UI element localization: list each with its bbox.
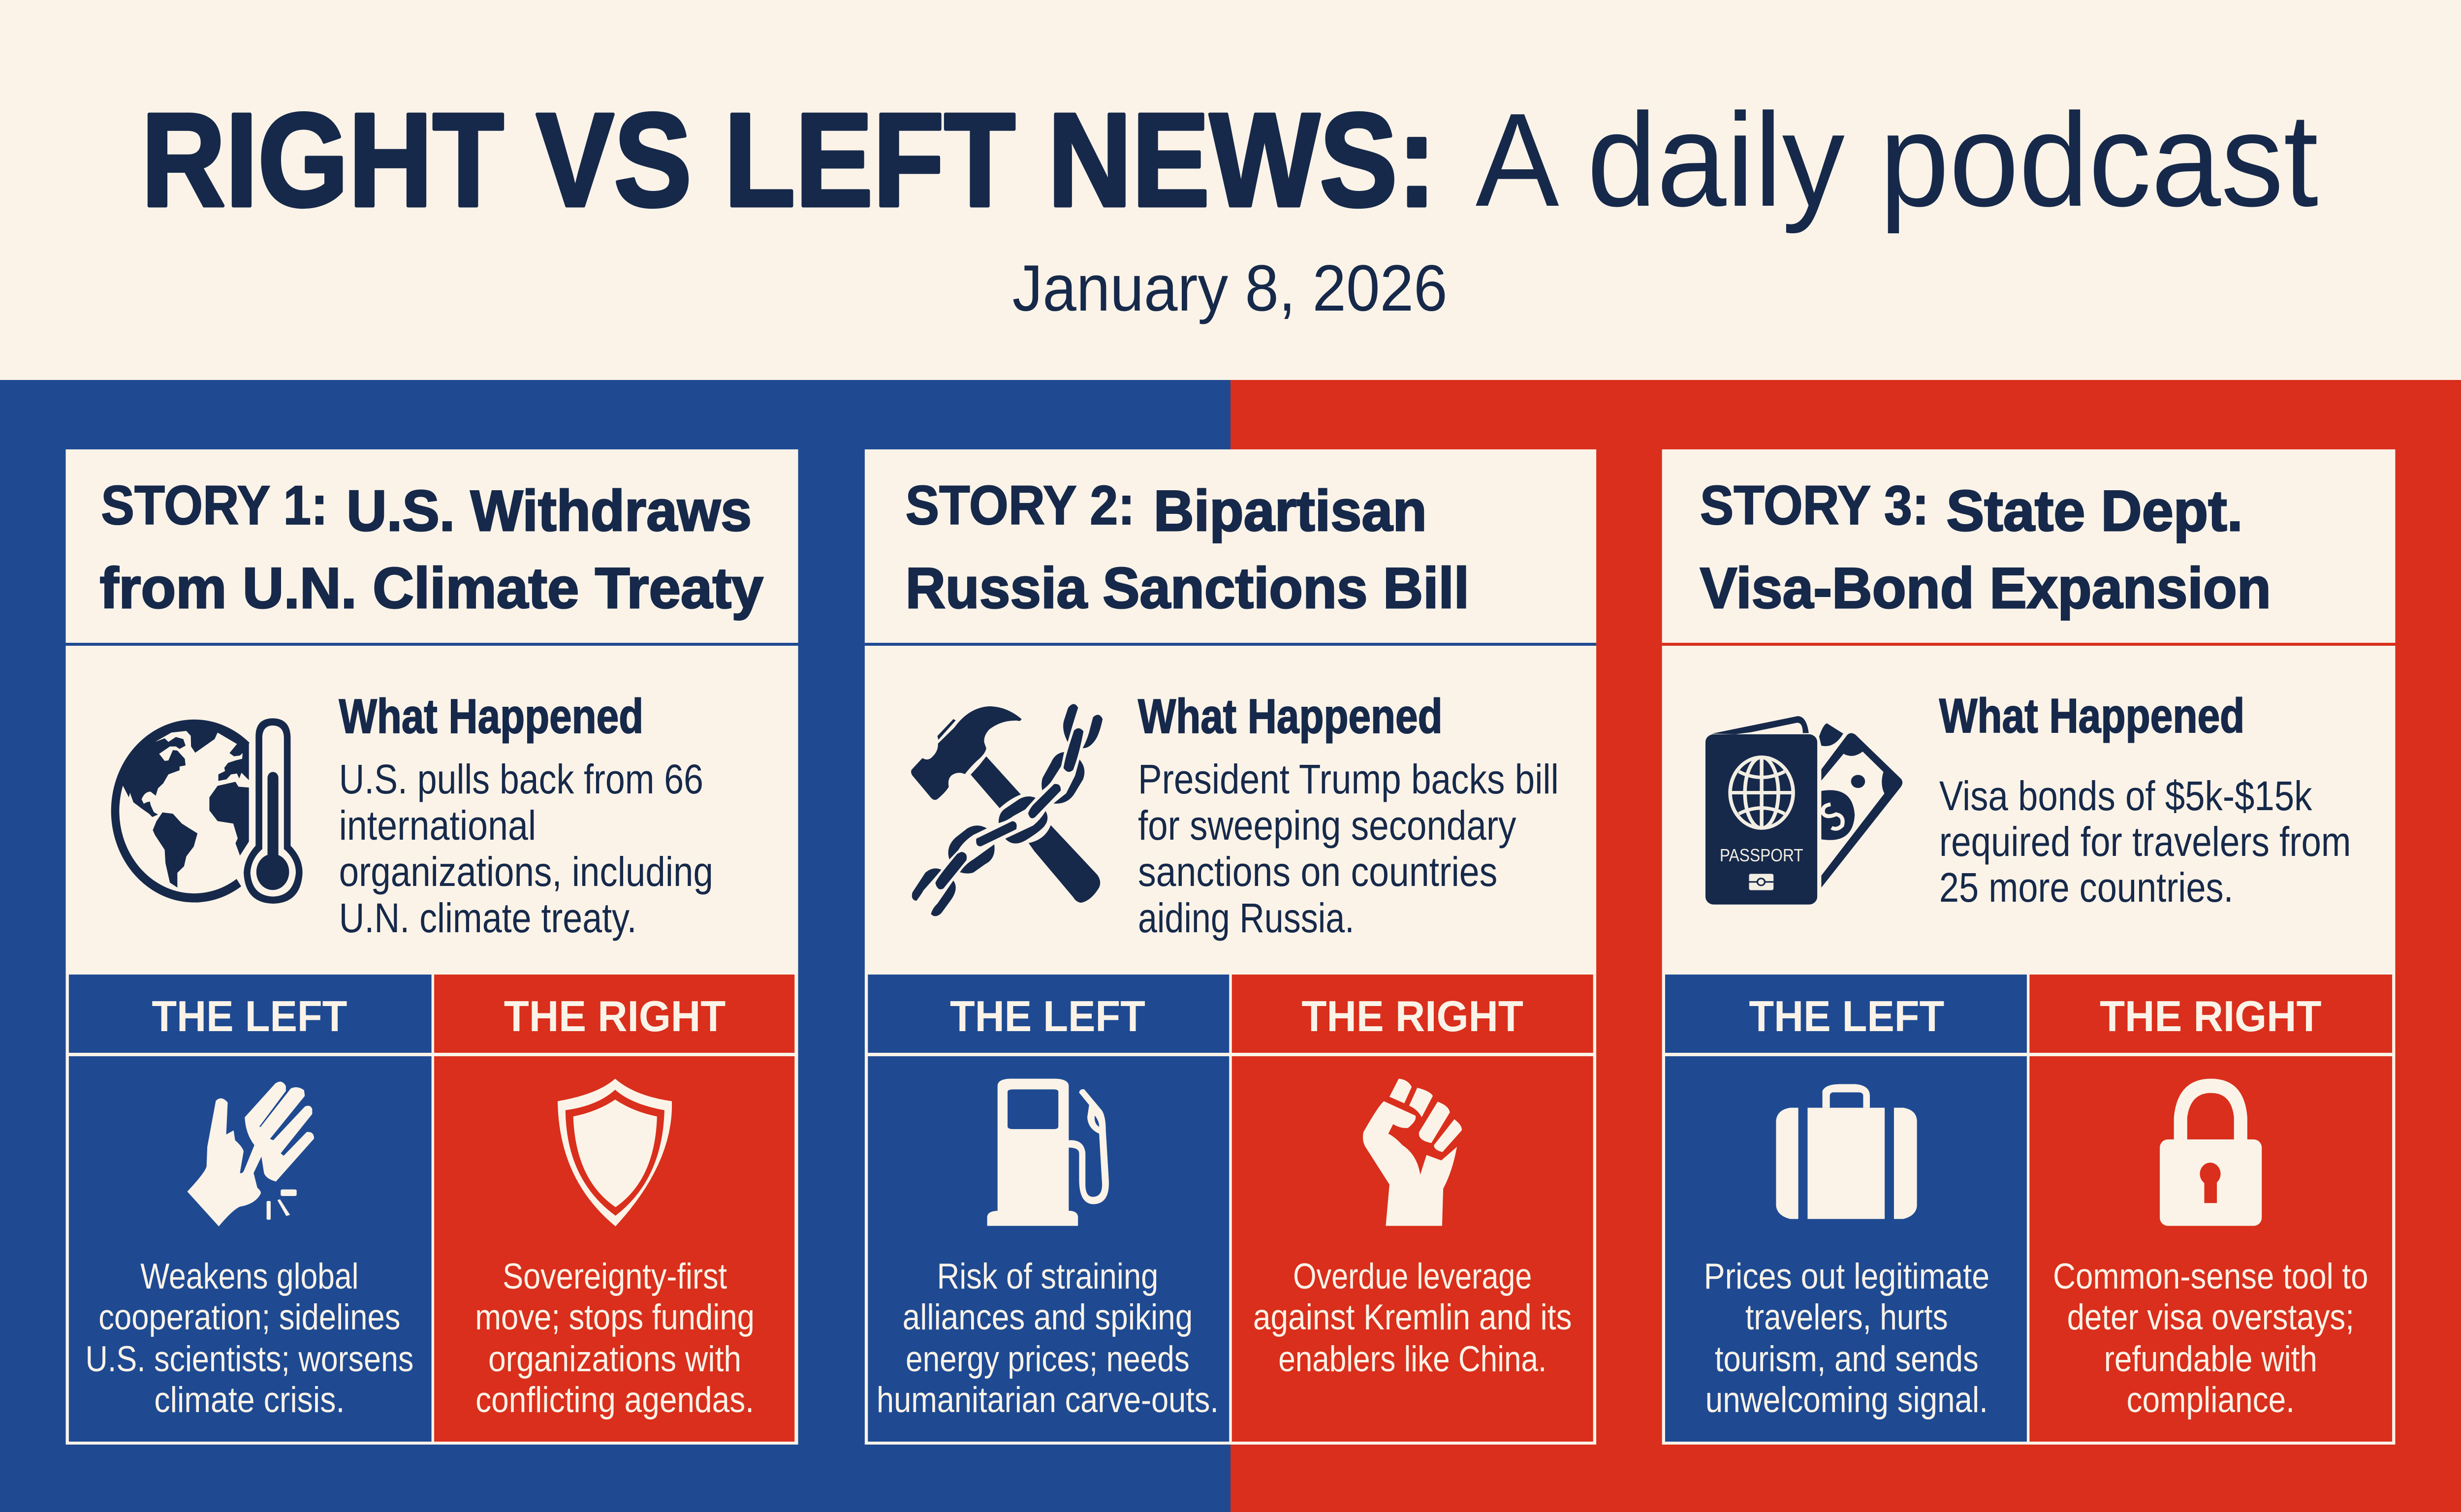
what happened 2: aiding Russia. <box>1138 895 1355 942</box>
left opinion 3: travelers, hurts <box>1745 1297 1948 1337</box>
title: A daily podcast <box>1476 86 2319 235</box>
icon: globe and thermometer <box>115 718 303 904</box>
icon: hammer and chain <box>911 704 1103 916</box>
icon: passport and money: PASSPORT <box>1720 846 1803 865</box>
left column story 3 <box>1665 975 2027 1442</box>
what happened 3: required for travelers from <box>1939 819 2351 865</box>
right opinion 3: Common-sense tool to <box>2053 1256 2368 1296</box>
icon: breaking handshake <box>187 1082 314 1227</box>
left opinion 1: U.S. scientists; worsens <box>86 1339 413 1379</box>
right opinion 1: organizations with <box>488 1339 741 1379</box>
panel: story 2 <box>865 449 1596 1445</box>
right opinion 3 <box>2053 1256 2368 1420</box>
left opinion 1 <box>86 1256 413 1420</box>
what happened 3: 25 more countries. <box>1939 865 2234 911</box>
story 1 heading <box>100 474 763 620</box>
story 2 heading: Bipartisan <box>1154 478 1427 543</box>
left column story 3: THE LEFT <box>1749 992 1944 1040</box>
story 3 heading: STORY 3: <box>1700 474 1929 536</box>
left opinion 2: alliances and spiking <box>903 1297 1193 1337</box>
left column story 2 <box>868 975 1229 1442</box>
left opinion 3 <box>1704 1256 1989 1420</box>
icon: padlock <box>2160 1079 2262 1226</box>
story 1 heading: STORY 1: <box>101 474 328 536</box>
what happened 3: Visa bonds of $5k-$15k <box>1939 773 2312 819</box>
left opinion 2: humanitarian carve-outs. <box>877 1380 1219 1420</box>
right opinion 1: Sovereignty-first <box>503 1256 727 1296</box>
right column story 2 <box>1232 975 1593 1442</box>
story 2 heading: STORY 2: <box>906 474 1135 536</box>
date: January 8, 2026 <box>1012 252 1448 324</box>
what happened 3: What Happened <box>1939 689 2244 743</box>
right opinion 1 <box>475 1256 755 1420</box>
what happened 1: What Happened <box>339 689 643 743</box>
left opinion 2: energy prices; needs <box>906 1339 1190 1379</box>
icon: passport and money <box>1705 716 1902 905</box>
what happened 1: U.N. climate treaty. <box>339 895 637 942</box>
header band <box>0 0 2461 380</box>
right opinion 3: refundable with <box>2104 1339 2317 1379</box>
right opinion 3: deter visa overstays; <box>2067 1297 2354 1337</box>
left opinion 1: climate crisis. <box>154 1380 345 1420</box>
what happened 2 <box>1138 689 1559 942</box>
left opinion 3: unwelcoming signal. <box>1705 1380 1988 1420</box>
right column story 3: THE RIGHT <box>2100 992 2322 1040</box>
left opinion 3: Prices out legitimate <box>1704 1256 1989 1296</box>
icon: shield <box>558 1079 672 1227</box>
story 3 heading: Visa-Bond Expansion <box>1700 556 2271 620</box>
right column story 1 <box>434 975 794 1442</box>
what happened 1: international <box>339 803 536 849</box>
background: right red half <box>1230 380 2461 1512</box>
story 3 heading <box>1700 474 2271 620</box>
panel: story 1 <box>66 449 798 1445</box>
right opinion 1: move; stops funding <box>475 1297 755 1337</box>
story 1 heading: U.S. Withdraws <box>347 478 752 543</box>
what happened 3 <box>1939 689 2351 911</box>
left opinion 2 <box>877 1256 1219 1420</box>
story 3 heading: State Dept. <box>1946 478 2243 543</box>
background: left blue half <box>0 380 1230 1512</box>
what happened 1 <box>339 689 713 942</box>
left opinion 1: cooperation; sidelines <box>98 1297 400 1337</box>
right opinion 2: Overdue leverage <box>1293 1256 1532 1296</box>
panel: story 3 <box>1662 449 2395 1445</box>
what happened 2: What Happened <box>1138 689 1443 743</box>
left opinion 1: Weakens global <box>140 1256 359 1296</box>
story 1 heading: from U.N. Climate Treaty <box>100 556 763 620</box>
left opinion 2: Risk of straining <box>937 1256 1158 1296</box>
right opinion 2: against Kremlin and its <box>1253 1297 1572 1337</box>
icon: raised fist <box>1363 1079 1462 1226</box>
right opinion 3: compliance. <box>2126 1380 2295 1420</box>
right column story 3 <box>2029 975 2392 1442</box>
left column story 2: THE LEFT <box>950 992 1145 1040</box>
title <box>141 86 2319 235</box>
title: RIGHT VS LEFT NEWS: <box>141 86 1436 234</box>
left column story 1 <box>69 975 432 1442</box>
right opinion 2 <box>1253 1256 1572 1379</box>
what happened 2: sanctions on countries <box>1138 849 1497 895</box>
left column story 1: THE LEFT <box>152 992 347 1040</box>
right opinion 1: conflicting agendas. <box>475 1380 754 1420</box>
story 2 heading: Russia Sanctions Bill <box>906 556 1469 620</box>
left opinion 3: tourism, and sends <box>1715 1339 1979 1379</box>
what happened 2: President Trump backs bill <box>1138 756 1559 803</box>
story 2 heading <box>906 474 1469 620</box>
right column story 1: THE RIGHT <box>504 992 726 1040</box>
what happened 2: for sweeping secondary <box>1138 803 1516 849</box>
right column story 2: THE RIGHT <box>1301 992 1523 1040</box>
what happened 1: U.S. pulls back from 66 <box>339 756 703 803</box>
right opinion 2: enablers like China. <box>1278 1339 1546 1379</box>
icon: fuel pump <box>987 1079 1109 1226</box>
what happened 1: organizations, including <box>339 849 713 895</box>
icon: suitcase <box>1776 1084 1917 1219</box>
